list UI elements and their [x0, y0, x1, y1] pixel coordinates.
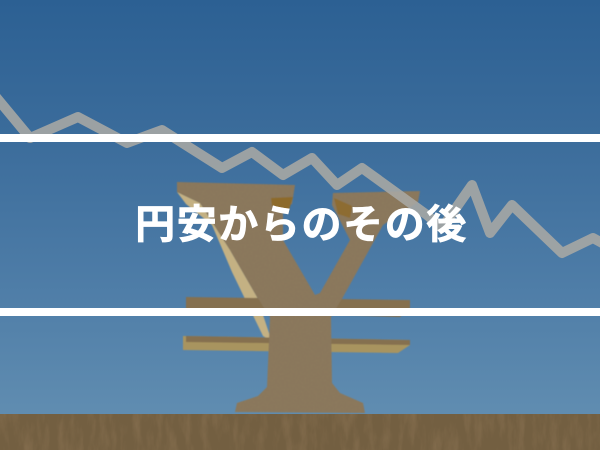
- upper white band: [0, 134, 600, 142]
- lower white band: [0, 308, 600, 316]
- yen upper bar: [186, 297, 410, 317]
- yen symbol statue: [177, 182, 420, 413]
- wooden ledge: [0, 414, 600, 450]
- yen grain: [177, 182, 420, 413]
- falling line chart: [0, 97, 600, 253]
- title: 円安からのその後: [135, 203, 468, 247]
- yen lower bar: [186, 336, 410, 345]
- yen lower bar side: [183, 336, 410, 353]
- yen shaded notch right: [334, 198, 352, 218]
- yen arms and stem: [177, 182, 420, 413]
- yen shaded notches: [271, 197, 293, 210]
- yen side face highlight: [177, 192, 270, 340]
